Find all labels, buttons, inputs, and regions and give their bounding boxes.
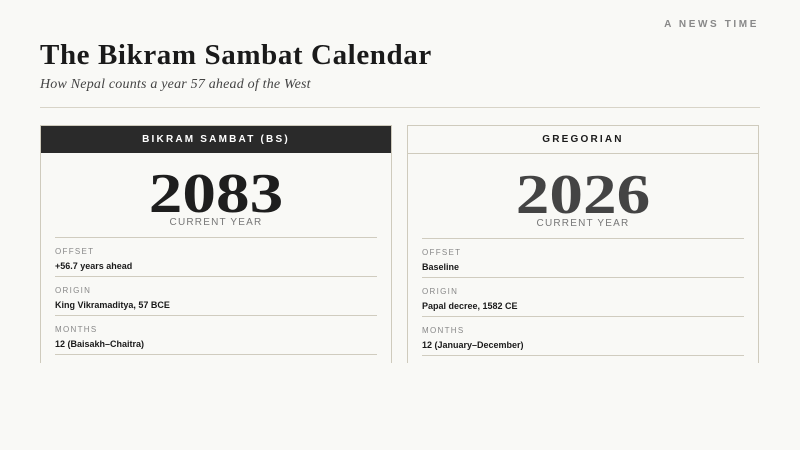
- header: gregorian: GREGORIAN: [542, 134, 624, 145]
- header: BS: [41, 126, 391, 153]
- label current year: CURRENT YEAR: [537, 218, 629, 229]
- rows gregorian: 12 (January–December): [422, 340, 524, 350]
- label current year: CURRENT YEAR: [170, 217, 262, 228]
- brand: A NEWS TIME: [664, 19, 759, 30]
- rows BS: ORIGIN: [55, 286, 91, 295]
- title: The Bikram Sambat Calendar: [40, 39, 432, 71]
- rows gregorian: MONTHS: [422, 326, 464, 335]
- header: gregorian: [408, 126, 758, 154]
- rows BS: OFFSET: [55, 247, 94, 256]
- header: BS: BIKRAM SAMBAT (BS): [142, 134, 290, 145]
- rows gregorian: Baseline: [422, 262, 459, 272]
- rows gregorian: [422, 238, 744, 356]
- subtitle: How Nepal counts a year 57 ahead of the West: [40, 77, 311, 92]
- panel: gregorian: [407, 125, 759, 363]
- rows BS: +56.7 years ahead: [55, 261, 132, 271]
- rows BS: King Vikramaditya, 57 BCE: [55, 300, 170, 310]
- rows gregorian: OFFSET: [422, 248, 461, 257]
- rows BS: 12 (Baisakh–Chaitra): [55, 339, 144, 349]
- rows BS: [55, 237, 377, 355]
- big year BS: 2083: [149, 163, 283, 225]
- big year gregorian: 2026: [516, 164, 650, 226]
- rows gregorian: Papal decree, 1582 CE: [422, 301, 518, 311]
- rows gregorian: ORIGIN: [422, 287, 458, 296]
- rows BS: MONTHS: [55, 325, 97, 334]
- panel: bikram sambat: [40, 125, 392, 363]
